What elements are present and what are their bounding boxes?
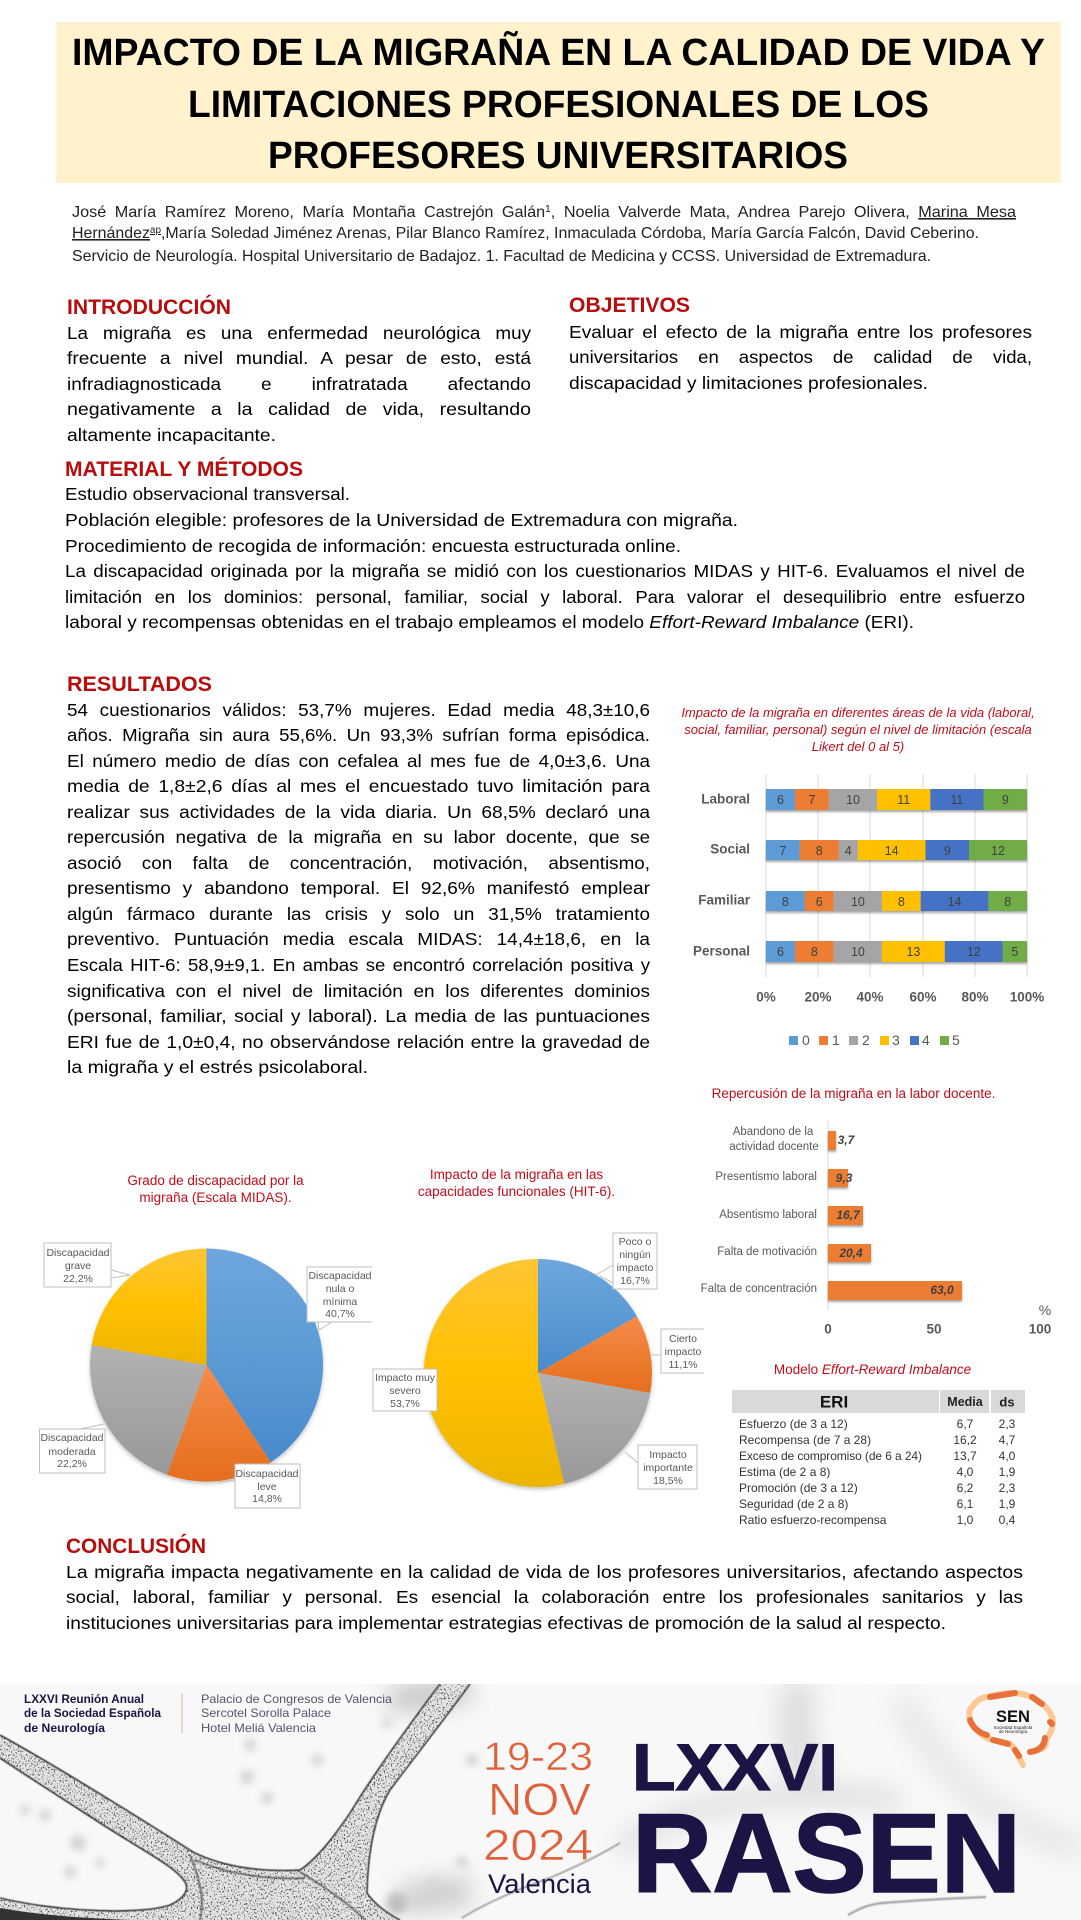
table header: Media (947, 1395, 984, 1409)
title banner: LIMITACIONES PROFESIONALES DE LOS (188, 84, 929, 126)
panel: material y métodos (65, 456, 1025, 632)
label: nula o mínima: nula o (326, 1283, 354, 1295)
bar: Personal: 12 (967, 945, 981, 959)
bar: Personal: 5 (1011, 945, 1018, 959)
table rows: 4,0 (957, 1465, 974, 1479)
panel: objetivos: OBJETIVOS (569, 293, 690, 317)
axis labels: 0% (756, 990, 776, 1004)
venues: Palacio de Congresos de Valencia (201, 1692, 392, 1706)
venues: Sercotel Sorolla Palace (201, 1706, 331, 1720)
legend: 1 (832, 1032, 840, 1048)
label: nula o mínima (307, 1267, 372, 1322)
authors and affiliations: ,María Soledad Jiménez Arenas, Pilar Blanco Ramírez, Inmaculada Córdoba, María García Falcón, David Ceberino. (161, 225, 979, 242)
bar: Personal: 8 (811, 945, 818, 959)
category labels: Personal (693, 944, 750, 958)
label: cierto impacto: 11,1% (668, 1359, 698, 1371)
bar: Social: 9 (944, 844, 951, 858)
panel: resultados: Escala HIT-6: 58,9±9,1. En ambas se encontró correlación positiva y (67, 955, 650, 975)
axis labels: 40% (856, 990, 884, 1004)
panel: resultados: 54 cuestionarios válidos: 53,7% mujeres. Edad media 48,3±10,6 (67, 700, 650, 720)
label: grave: 22,2% (63, 1273, 93, 1285)
label: nula o mínima: 40,7% (325, 1308, 355, 1320)
bar: Familiar: 6 (816, 895, 823, 909)
congress name: LXXVI Reunión Anual (24, 1692, 144, 1706)
table rows: Ratio esfuerzo-recompensa (739, 1513, 887, 1527)
legend: 4 (922, 1032, 930, 1048)
table rows: Esfuerzo (de 3 a 12) (739, 1417, 848, 1431)
panel: introducción: frecuente a nivel mundial. A pesar de esto, está (67, 348, 531, 368)
neuron (0, 1684, 480, 1920)
label: impacto muy severo: severo (389, 1385, 421, 1397)
category labels: Laboral (701, 792, 750, 806)
label: poco o ningún impacto (613, 1233, 657, 1289)
icon: SEN brain logo: Sociedad Española (994, 1725, 1033, 1730)
panel: objetivos (569, 293, 1032, 393)
bar values (836, 1133, 954, 1297)
bar: Familiar: 8 (1004, 895, 1011, 909)
authors and affiliations: Servicio de Neurología. Hospital Universitario de Badajoz. 1. Facultad de Medicina y CCSS. Universidad de Extremadura. (72, 248, 931, 265)
bar: Familiar: 10 (851, 895, 865, 909)
chart title: migraña (Escala MIDAS). (139, 1190, 292, 1205)
axis labels (756, 990, 1044, 1004)
bar: Laboral: 10 (846, 793, 860, 807)
panel: conclusión (66, 1533, 1023, 1633)
congress name (24, 1692, 161, 1735)
bar: Familiar (766, 891, 1027, 911)
label: cierto impacto (661, 1329, 704, 1373)
panel: conclusión: CONCLUSIÓN (66, 1533, 206, 1558)
label: leve (235, 1464, 300, 1508)
congress name: de la Sociedad Española (24, 1706, 161, 1720)
authors and affiliations: , Noelia Valverde Mata, Andrea Parejo Olivera, (551, 204, 918, 221)
panel: material y métodos: Población elegible: profesores de la Universidad de Extremadura con migraña. (65, 510, 738, 530)
thin fibres (462, 1843, 986, 1918)
table rows: 4,0 (999, 1449, 1016, 1463)
table rows: 13,7 (953, 1449, 977, 1463)
table rows: 2,3 (999, 1481, 1016, 1495)
panel: resultados: repercusión negativa de la migraña en su labor docente, que se (67, 827, 650, 847)
chart title: Likert del 0 al 5) (812, 739, 904, 754)
panel: introducción: altamente incapacitante. (67, 425, 276, 445)
label: moderada: 22,2% (57, 1458, 87, 1470)
label: poco o ningún impacto: ningún (619, 1249, 651, 1261)
bar: Social: 4 (845, 844, 852, 858)
chart title: Impacto de la migraña en diferentes áreas de la vida (laboral, (681, 705, 1035, 720)
label: poco o ningún impacto: Poco o (619, 1236, 651, 1248)
bar: Personal (766, 941, 1027, 962)
title banner: PROFESORES UNIVERSITARIOS (268, 135, 848, 177)
table rows: Recompensa (de 7 a 28) (739, 1433, 871, 1447)
panel: resultados: (personal, familiar, social y laboral). La media de las puntuaciones (67, 1006, 650, 1026)
axis labels: % (1039, 1302, 1051, 1318)
label: impacto muy severo: 53,7% (390, 1398, 420, 1410)
label: moderada: moderada (48, 1446, 96, 1458)
panel: resultados: realizar sus actividades de la vida diaria. Un 68,5% declaró una (67, 802, 650, 822)
table rows: 6,7 (957, 1417, 974, 1431)
dates: 2024 (483, 1821, 593, 1870)
chart: MIDAS pie (40, 1173, 372, 1508)
bar: Familiar: 8 (898, 895, 905, 909)
panel: objetivos: discapacidad y limitaciones profesionales. (569, 373, 928, 393)
authors and affiliations (72, 204, 1016, 265)
dates: 19-23 (483, 1735, 593, 1779)
axis labels: 0 (824, 1322, 832, 1336)
axis labels: 80% (961, 990, 989, 1004)
label: impacto muy severo: Impacto muy (375, 1372, 436, 1384)
bar: Social (766, 840, 1027, 860)
panel: conclusión: instituciones universitarias para implementar estrategias efectivas de promoción de la salud al respecto. (66, 1613, 946, 1633)
category labels: Presentismo laboral (715, 1171, 817, 1183)
bar: Social: 14 (885, 844, 899, 858)
legend: 0 (802, 1032, 810, 1048)
label: moderada: Discapacidad (40, 1432, 104, 1444)
bar values: 9,3 (836, 1171, 853, 1185)
bar: Familiar: 8 (782, 895, 789, 909)
title banner: IMPACTO DE LA MIGRAÑA EN LA CALIDAD DE VIDA Y (72, 30, 1045, 74)
panel: conclusión: La migraña impacta negativamente en la calidad de vida de los profesores universitarios, afectando aspectos (66, 1562, 1023, 1582)
label: nula o mínima: Discapacidad (308, 1270, 372, 1282)
authors and affiliations: Hernández (72, 225, 150, 242)
category labels: Familiar (698, 892, 751, 908)
category labels: Social (710, 842, 750, 856)
label: grave: Discapacidad (46, 1247, 110, 1259)
panel: material y métodos: limitación en los dominios: personal, familiar, social y laboral. Para valorar el desequilibrio entre esfuerzo (65, 587, 1025, 607)
dates: NOV (488, 1774, 591, 1825)
legend (789, 1032, 960, 1048)
congress wordmark: LXXVI (632, 1730, 838, 1804)
bar values: 16,7 (836, 1208, 861, 1222)
bar: Laboral: 7 (808, 793, 815, 807)
axis labels: 50 (926, 1322, 942, 1336)
panel: resultados: asoció con falta de concentración, motivación, absentismo, (67, 853, 650, 873)
pie slices (424, 1259, 652, 1487)
authors and affiliations: 1 (545, 204, 551, 215)
bars (828, 1131, 962, 1300)
bar: Laboral (766, 789, 1027, 810)
panel: introducción: La migraña es una enfermedad neurológica muy (67, 323, 531, 343)
table rows: Promoción (de 3 a 12) (739, 1481, 858, 1495)
panel: objetivos: universitarios en aspectos de calidad de vida, (569, 347, 1032, 367)
panel: resultados: algún fármaco durante las crisis y solo un 31,5% tratamiento (67, 904, 650, 924)
venues (202, 1694, 392, 1732)
table rows: 2,3 (999, 1417, 1016, 1431)
panel: resultados: RESULTADOS (67, 672, 212, 696)
panel: material y métodos: MATERIAL Y MÉTODOS (65, 456, 303, 481)
panel: conclusión: social, laboral, familiar y personal. Es esencial la colaboración entre los profesionales sanitarios y las (66, 1587, 1023, 1607)
axis labels: 100% (1010, 990, 1044, 1004)
label: grave (44, 1243, 111, 1287)
bar: Personal: 13 (906, 945, 920, 959)
pie slices (90, 1248, 323, 1482)
panel: objetivos: Evaluar el efecto de la migraña entre los profesores (569, 322, 1032, 342)
label: poco o ningún impacto: impacto (617, 1262, 654, 1274)
table rows (739, 1417, 1016, 1527)
table rows: Exceso de compromiso (de 6 a 24) (739, 1449, 922, 1463)
panel: resultados: años. Migraña sin aura 55,6%. Un 93,3% sufrían forma episódica. (67, 725, 650, 745)
bar: Social: 12 (991, 844, 1005, 858)
table header: ds (999, 1394, 1015, 1410)
authors and affiliations: Marina Mesa (918, 204, 1016, 221)
table rows: 1,9 (999, 1497, 1016, 1511)
congress wordmark: RASEN (632, 1791, 1021, 1916)
table rows: 6,1 (957, 1497, 974, 1511)
category labels: Abandono de la (733, 1126, 814, 1138)
panel: resultados (67, 672, 650, 1077)
panel: resultados: preventivo. Puntuación media escala MIDAS: 14,4±18,6, en la (67, 929, 650, 949)
panel: material y métodos: Estudio observacional transversal. (65, 484, 350, 504)
bar: Familiar: 14 (948, 895, 962, 909)
title banner (56, 22, 1061, 183)
legend: 5 (952, 1032, 960, 1048)
chart title (681, 705, 1035, 754)
icon: SEN brain logo: de Neurología (999, 1729, 1028, 1734)
category labels: actividad docente (729, 1141, 819, 1153)
label: impacto importante: importante (643, 1462, 693, 1474)
table rows: 1,0 (957, 1513, 974, 1527)
label: cierto impacto: impacto (665, 1346, 702, 1358)
chart title (127, 1173, 304, 1205)
axis labels: 20% (804, 990, 832, 1004)
category labels: Falta de concentración (701, 1283, 817, 1295)
table header: ERI (820, 1392, 848, 1412)
footer banner: congress (0, 1684, 1081, 1920)
background blur (390, 1684, 1081, 1900)
chart: stacked bars of life areas (681, 705, 1044, 1048)
authors and affiliations: ap (150, 225, 161, 236)
dates (486, 1742, 592, 1860)
bar: Personal: 6 (777, 945, 784, 959)
panel: resultados: la migraña y el estrés psicolaboral. (67, 1057, 368, 1077)
panel: material y métodos: Procedimiento de recogida de información: encuesta estructurada online. (65, 536, 681, 556)
label: leve: Discapacidad (235, 1468, 299, 1480)
panel: introducción (67, 294, 531, 445)
table rows: Estima (de 2 a 8) (739, 1465, 830, 1479)
table rows: 6,2 (957, 1481, 974, 1495)
table title: Modelo Effort-Reward Imbalance (774, 1362, 971, 1377)
panel: material y métodos: laboral y recompensas obtenidas en el trabajo empleamos el modelo Effort-Reward Imbalance (ERI). (65, 612, 914, 632)
panel: material y métodos: La discapacidad originada por la migraña se midió con los cuestionarios MIDAS y HIT-6. Evaluamos el nivel de (65, 561, 1025, 581)
label: leve: leve (257, 1481, 277, 1493)
venues: Hotel Meliá Valencia (201, 1721, 316, 1735)
panel: resultados: media de 1,8±2,6 días al mes el encuestado tuvo limitación para (67, 776, 650, 796)
chart title: Grado de discapacidad por la (127, 1173, 304, 1188)
category labels (693, 792, 751, 958)
bar values: 3,7 (838, 1133, 856, 1147)
label: impacto importante (638, 1445, 697, 1489)
chart: HIT-6 pie (373, 1167, 704, 1489)
bar: Social: 8 (816, 844, 823, 858)
table rows: 16,2 (953, 1433, 977, 1447)
panel: introducción: infradiagnosticada e infratratada afectando (67, 374, 531, 394)
bar: Laboral: 11 (897, 793, 910, 807)
category labels (701, 1126, 819, 1295)
label: impacto muy severo (373, 1369, 437, 1411)
icon: SEN brain logo: SEN (996, 1708, 1030, 1726)
axis labels: 60% (909, 990, 937, 1004)
table rows: Seguridad (de 2 a 8) (739, 1497, 848, 1511)
chart title: capacidades funcionales (HIT-6). (418, 1184, 615, 1199)
label: cierto impacto: Cierto (669, 1333, 697, 1345)
table rows: 1,9 (999, 1465, 1016, 1479)
panel: resultados: El número medio de días con cefalea al mes fue de 4,0±3,6. Una (67, 751, 650, 771)
label: moderada (40, 1429, 105, 1473)
bar values: 63,0 (930, 1283, 954, 1297)
legend: 3 (892, 1032, 900, 1048)
panel: resultados: presentismo y abandono temporal. El 92,6% manifestó emplear (67, 878, 650, 898)
chart title: social, familiar, personal) según el nivel de limitación (escala (684, 722, 1032, 737)
table header (732, 1390, 1025, 1413)
label: impacto importante: 18,5% (653, 1475, 683, 1487)
category labels: Falta de motivación (717, 1246, 817, 1258)
label: poco o ningún impacto: 16,7% (620, 1275, 650, 1287)
label: leve: 14,8% (252, 1493, 282, 1505)
congress wordmark (636, 1744, 1014, 1894)
panel: introducción: negativamente a la calidad de vida, resultando (67, 399, 531, 419)
chart: teaching impact bars (701, 1086, 1051, 1336)
label: nula o mínima: mínima (323, 1296, 357, 1308)
table: ERI model (732, 1362, 1025, 1527)
congress name: de Neurología (24, 1721, 105, 1735)
bar values: 20,4 (838, 1246, 863, 1260)
bar: Laboral: 6 (777, 793, 784, 807)
label: grave: grave (65, 1260, 91, 1272)
table rows: 0,4 (999, 1513, 1016, 1527)
chart title: Impacto de la migraña en las (430, 1167, 603, 1182)
panel: resultados: significativa con el nivel de limitación en los diferentes dominios (67, 981, 650, 1001)
panel: introducción: INTRODUCCIÓN (67, 294, 231, 319)
bar: Social: 7 (779, 844, 786, 858)
authors and affiliations: José María Ramírez Moreno, María Montaña Castrejón Galán (72, 204, 539, 221)
bar: Laboral: 11 (950, 793, 963, 807)
panel: resultados: ERI fue de 1,0±0,4, no observándose relación entre la gravedad de (67, 1032, 650, 1052)
table rows: 4,7 (999, 1433, 1016, 1447)
city: Valencia (488, 1869, 592, 1899)
bar: Laboral: 9 (1002, 793, 1009, 807)
axis labels: 100 (1029, 1322, 1051, 1336)
legend: 2 (862, 1032, 870, 1048)
label: impacto importante: Impacto (649, 1449, 687, 1461)
axis labels (824, 1302, 1051, 1336)
chart title (418, 1167, 615, 1199)
chart title: Repercusión de la migraña en la labor docente. (712, 1086, 995, 1101)
icon: SEN brain logo (969, 1693, 1053, 1765)
bar: Personal: 10 (851, 945, 865, 959)
category labels: Absentismo laboral (719, 1209, 817, 1221)
